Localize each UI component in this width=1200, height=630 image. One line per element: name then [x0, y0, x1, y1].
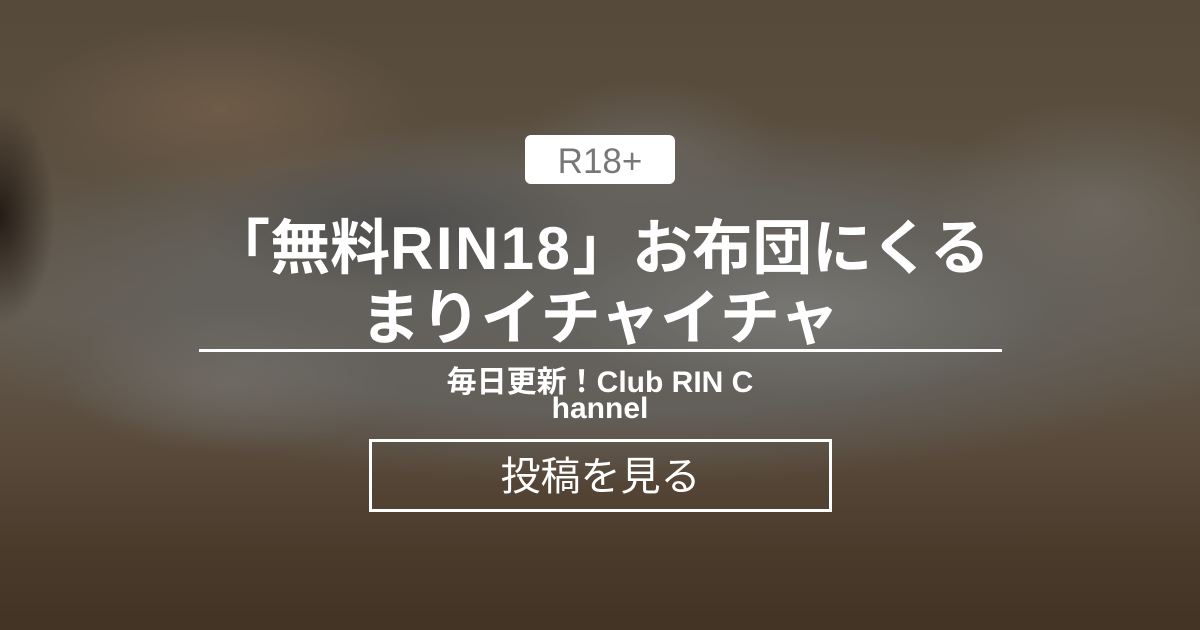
button: view post: 投稿を見る	[500, 455, 700, 499]
badge: R18+: R18+	[558, 142, 642, 181]
button: view post	[369, 439, 832, 512]
title underline	[199, 349, 1002, 352]
creator name: hannel	[552, 392, 648, 425]
title	[210, 215, 990, 352]
creator name	[447, 366, 753, 425]
creator name: 毎日更新！Club RIN C	[447, 366, 753, 399]
title: 「無料RIN18」お布団にくる	[210, 215, 990, 282]
badge: R18+	[525, 135, 675, 184]
title: まりイチャイチャ	[361, 285, 839, 352]
